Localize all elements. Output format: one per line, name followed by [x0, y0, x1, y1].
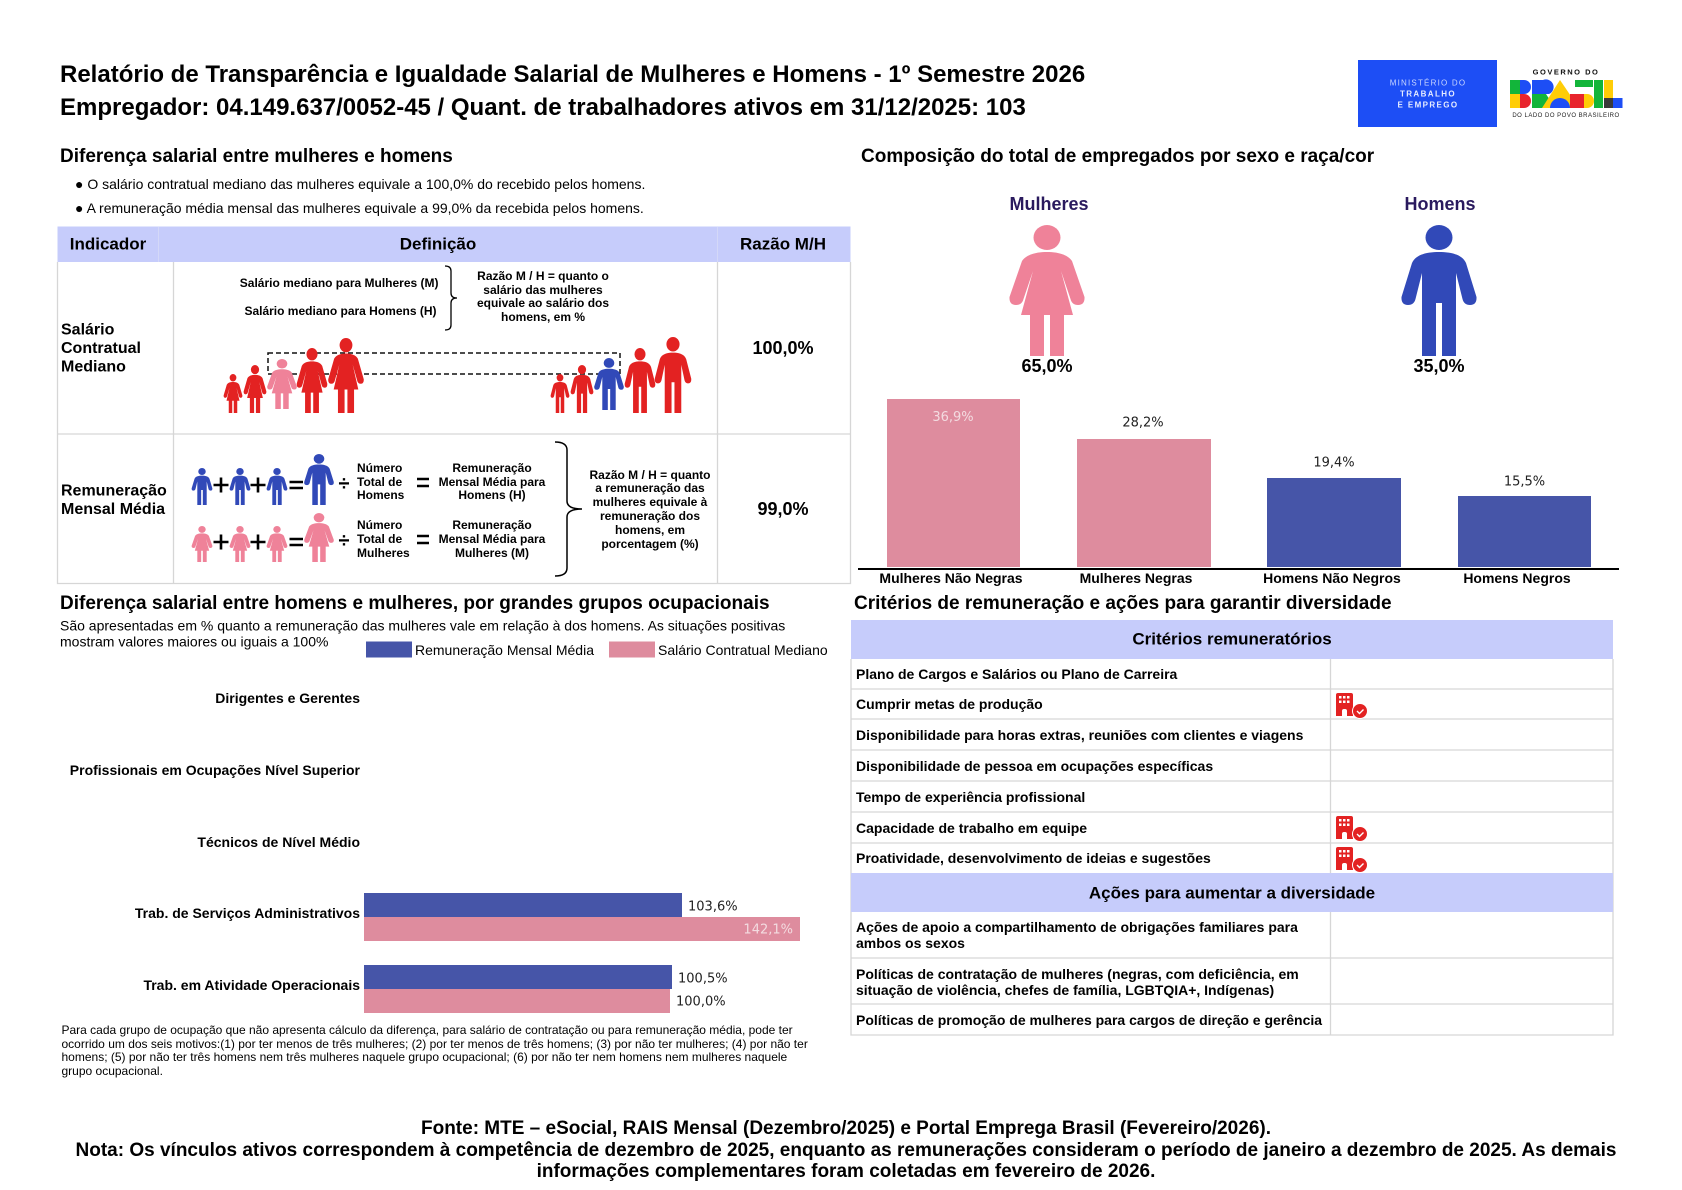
panel: grupos ocupacionais	[60, 593, 828, 1078]
criteria rows: Tempo de experiência profissional	[856, 789, 1085, 805]
definition text: a remuneração das	[595, 481, 705, 495]
brace	[445, 266, 457, 330]
bullet list: ● O salário contratual mediano das mulheres equivale a 100,0% do recebido pelos homens.	[75, 176, 645, 192]
pictogram: homens	[1401, 194, 1477, 376]
panel: critérios e ações	[851, 593, 1613, 1035]
bar chart: grupos ocupacionais: Técnicos de Nível Médio	[197, 834, 360, 850]
panel: composição	[858, 146, 1619, 586]
bar chart: grupos ocupacionais: Trab. de Serviços Administrativos	[135, 905, 360, 921]
icon: women formula: ÷	[339, 530, 350, 552]
criteria rows: Proatividade, desenvolvimento de ideias e sugestões	[856, 850, 1211, 866]
definition text: mulheres equivale à	[593, 495, 708, 509]
row: remuneração mensal média: Remuneração	[61, 482, 167, 500]
pictogram: mulheres	[1009, 194, 1089, 376]
definition text	[477, 269, 609, 324]
icon: check building	[1336, 816, 1368, 842]
action rows: ambos os sexos	[856, 935, 965, 951]
description: mostram valores maiores ou iguais a 100%	[60, 634, 328, 650]
definition text	[589, 468, 711, 551]
logo: Ministério do Trabalho e Emprego: MINISTÉRIO DO	[1390, 78, 1466, 88]
bar chart: sexo e raça/cor: Mulheres Negras	[1080, 570, 1193, 586]
legend: Remuneração Mensal Média	[415, 642, 594, 658]
definition text: salário das mulheres	[483, 283, 603, 297]
action rows: Políticas de promoção de mulheres para cargos de direção e gerência	[856, 1012, 1322, 1028]
row: salário contratual mediano: Salário	[61, 322, 115, 338]
row: remuneração mensal média: Mensal Média	[61, 501, 165, 518]
title: Empregador: 04.149.637/0052-45 / Quant. de trabalhadores ativos em 31/12/2025: 103	[60, 94, 1026, 121]
bar chart: grupos ocupacionais: 100,0%	[676, 994, 726, 1010]
bar chart: sexo e raça/cor: Homens Não Negros	[1263, 570, 1401, 586]
action rows: Políticas de contratação de mulheres (negras, com deficiência, em	[856, 966, 1299, 982]
description	[60, 618, 785, 650]
women formula text: Total de	[357, 532, 402, 546]
brace	[555, 442, 582, 576]
pictogram: homens: 35,0%	[1413, 356, 1465, 376]
row: salário contratual mediano: Contratual	[61, 340, 141, 357]
definition text: remuneração dos	[600, 509, 700, 523]
icon: men formula: ÷	[339, 473, 350, 495]
bar chart: grupos ocupacionais: 142,1%	[743, 922, 793, 938]
title	[60, 61, 1085, 121]
heading: composição: Composição do total de empregados por sexo e raça/cor	[861, 146, 1375, 167]
men formula text: Mensal Média para	[439, 475, 546, 489]
table header: Razão M/H	[740, 234, 826, 254]
criteria rows: Disponibilidade de pessoa em ocupações específicas	[856, 758, 1213, 774]
definition text: Razão M / H = quanto o	[477, 269, 609, 283]
bar chart: sexo e raça/cor: 19,4%	[1313, 456, 1355, 470]
row: salário contratual mediano	[61, 266, 814, 413]
pictogram: mulheres: Mulheres	[1009, 194, 1089, 214]
heading: grupos ocupacionais: Diferença salarial entre homens e mulheres, por grandes grupos ocupacionais	[60, 593, 770, 614]
icon: men row	[551, 337, 691, 413]
row: salário contratual mediano: Salário mediano para Homens (H)	[244, 304, 437, 318]
row: remuneração mensal média	[61, 442, 809, 576]
criteria rows: Capacidade de trabalho em equipe	[856, 820, 1087, 836]
icon: check building	[1336, 847, 1368, 872]
table header: ações: Ações para aumentar a diversidade	[1089, 884, 1375, 902]
women formula text: Remuneração	[452, 518, 532, 532]
footnote: Para cada grupo de ocupação que não apresenta cálculo da diferença, para salário de contratação ou para remuneração média, pode ter	[62, 1023, 793, 1037]
action rows	[856, 919, 1322, 1028]
bullet list	[75, 176, 645, 216]
value: 100,0%: 100,0%	[752, 338, 814, 358]
table header: critérios remuneratórios	[851, 620, 1613, 659]
logo: Governo do Brasil: GOVERNO DO	[1533, 68, 1599, 76]
logo: Governo do Brasil	[1510, 68, 1622, 119]
men formula text: Homens (H)	[458, 488, 526, 502]
icon: women row	[224, 338, 364, 413]
table header: Definição	[400, 234, 476, 254]
logo: Governo do Brasil: DO LADO DO POVO BRASILEIRO	[1512, 113, 1620, 119]
table header: ações	[851, 873, 1613, 912]
heading: critérios: Critérios de remuneração e ações para garantir diversidade	[854, 593, 1392, 614]
title: Relatório de Transparência e Igualdade Salarial de Mulheres e Homens - 1º Semestre 2026	[60, 61, 1085, 88]
row: salário contratual mediano: Salário mediano para Mulheres (M)	[240, 276, 438, 290]
footer: fonte e nota	[76, 1118, 1616, 1182]
panel: diferença salarial	[58, 146, 850, 584]
footnote: grupo ocupacional.	[62, 1064, 163, 1078]
bar chart: sexo e raça/cor: 36,9%	[932, 410, 974, 425]
footnote	[62, 1023, 808, 1078]
bar chart: sexo e raça/cor: 15,5%	[1504, 474, 1545, 490]
table header: critérios remuneratórios: Critérios remuneratórios	[1132, 630, 1332, 648]
icon: dashed median box	[268, 353, 620, 374]
icon: check building	[1336, 693, 1368, 718]
criteria rows: Disponibilidade para horas extras, reuniões com clientes e viagens	[856, 727, 1304, 743]
footnote: ocorrido um dos seis motivos:(1) por ter menos de três mulheres; (2) por ter menos de três homens; (3) por não ter mulheres; (4) por não ter	[62, 1037, 808, 1051]
logo: Ministério do Trabalho e Emprego: E EMPREGO	[1397, 100, 1459, 110]
footnote: homens; (5) por não ter três homens nem três mulheres naquele grupo ocupacional; (6) por não ter nem homens nem mulheres naquele	[62, 1050, 788, 1064]
pictogram: mulheres: 65,0%	[1021, 356, 1073, 376]
criteria rows	[856, 666, 1304, 866]
criteria rows: Cumprir metas de produção	[856, 696, 1043, 712]
criteria rows: Plano de Cargos e Salários ou Plano de Carreira	[856, 666, 1178, 682]
definition text: Razão M / H = quanto	[589, 468, 711, 482]
icon: women formula	[192, 513, 429, 562]
value: 99,0%: 99,0%	[757, 499, 809, 519]
definition text: homens, em	[615, 523, 685, 537]
action rows: situação de violência, chefes de família, LGBTQIA+, Indígenas)	[856, 982, 1274, 998]
definition text: porcentagem (%)	[601, 537, 699, 551]
heading: diferença salarial: Diferença salarial entre mulheres e homens	[60, 146, 453, 167]
women formula text: Número	[357, 518, 402, 532]
row: salário contratual mediano: Mediano	[61, 358, 126, 376]
bar chart: grupos ocupacionais: 103,6%	[688, 900, 738, 914]
icon: men formula	[192, 454, 429, 505]
bar chart: grupos ocupacionais: Dirigentes e Gerentes	[215, 690, 360, 706]
bar chart: grupos ocupacionais	[70, 690, 800, 1013]
men formula text	[357, 461, 546, 502]
action rows: Ações de apoio a compartilhamento de obrigações familiares para	[856, 919, 1298, 935]
logo: Ministério do Trabalho e Emprego	[1358, 60, 1497, 127]
men formula text: Homens	[357, 488, 405, 502]
table header	[58, 226, 850, 262]
bar chart: sexo e raça/cor: Homens Negros	[1463, 570, 1571, 586]
legend	[366, 642, 828, 658]
women formula text: Mulheres	[357, 546, 410, 560]
definition text: homens, em %	[501, 310, 585, 324]
women formula text	[357, 518, 546, 560]
description: São apresentadas em % quanto a remuneração das mulheres vale em relação à dos homens. As situações positivas	[60, 618, 785, 634]
footer: fonte e nota: Nota: Os vínculos ativos correspondem à competência de dezembro de 2025, enquanto as remunerações consideram o período de janeiro a dezembro de 2025. As demais	[76, 1140, 1616, 1161]
bar chart: grupos ocupacionais: Profissionais em Ocupações Nível Superior	[70, 762, 361, 778]
bar chart: grupos ocupacionais: Trab. em Atividade Operacionais	[143, 977, 360, 993]
bar chart: sexo e raça/cor: 28,2%	[1122, 416, 1164, 430]
footer: fonte e nota: informações complementares foram coletadas em fevereiro de 2026.	[537, 1161, 1155, 1182]
definition text: equivale ao salário dos	[477, 296, 609, 310]
bar chart: grupos ocupacionais: 100,5%	[678, 972, 728, 986]
women formula text: Mensal Média para	[439, 532, 546, 546]
men formula text: Número	[357, 461, 402, 475]
legend: Salário Contratual Mediano	[658, 642, 828, 658]
men formula text: Total de	[357, 475, 402, 489]
bullet list: ● A remuneração média mensal das mulheres equivale a 99,0% da recebida pelos homens.	[75, 200, 644, 216]
pictogram: homens: Homens	[1404, 194, 1476, 214]
footer: fonte e nota: Fonte: MTE – eSocial, RAIS Mensal (Dezembro/2025) e Portal Emprega Brasil (Fevereiro/2026).	[421, 1118, 1271, 1139]
bar chart: sexo e raça/cor	[858, 399, 1619, 586]
women formula text: Mulheres (M)	[455, 546, 529, 560]
logo: Ministério do Trabalho e Emprego: TRABALHO	[1400, 90, 1456, 98]
table header: Indicador	[70, 234, 147, 254]
bar chart: sexo e raça/cor: Mulheres Não Negras	[879, 570, 1023, 586]
men formula text: Remuneração	[452, 461, 532, 475]
